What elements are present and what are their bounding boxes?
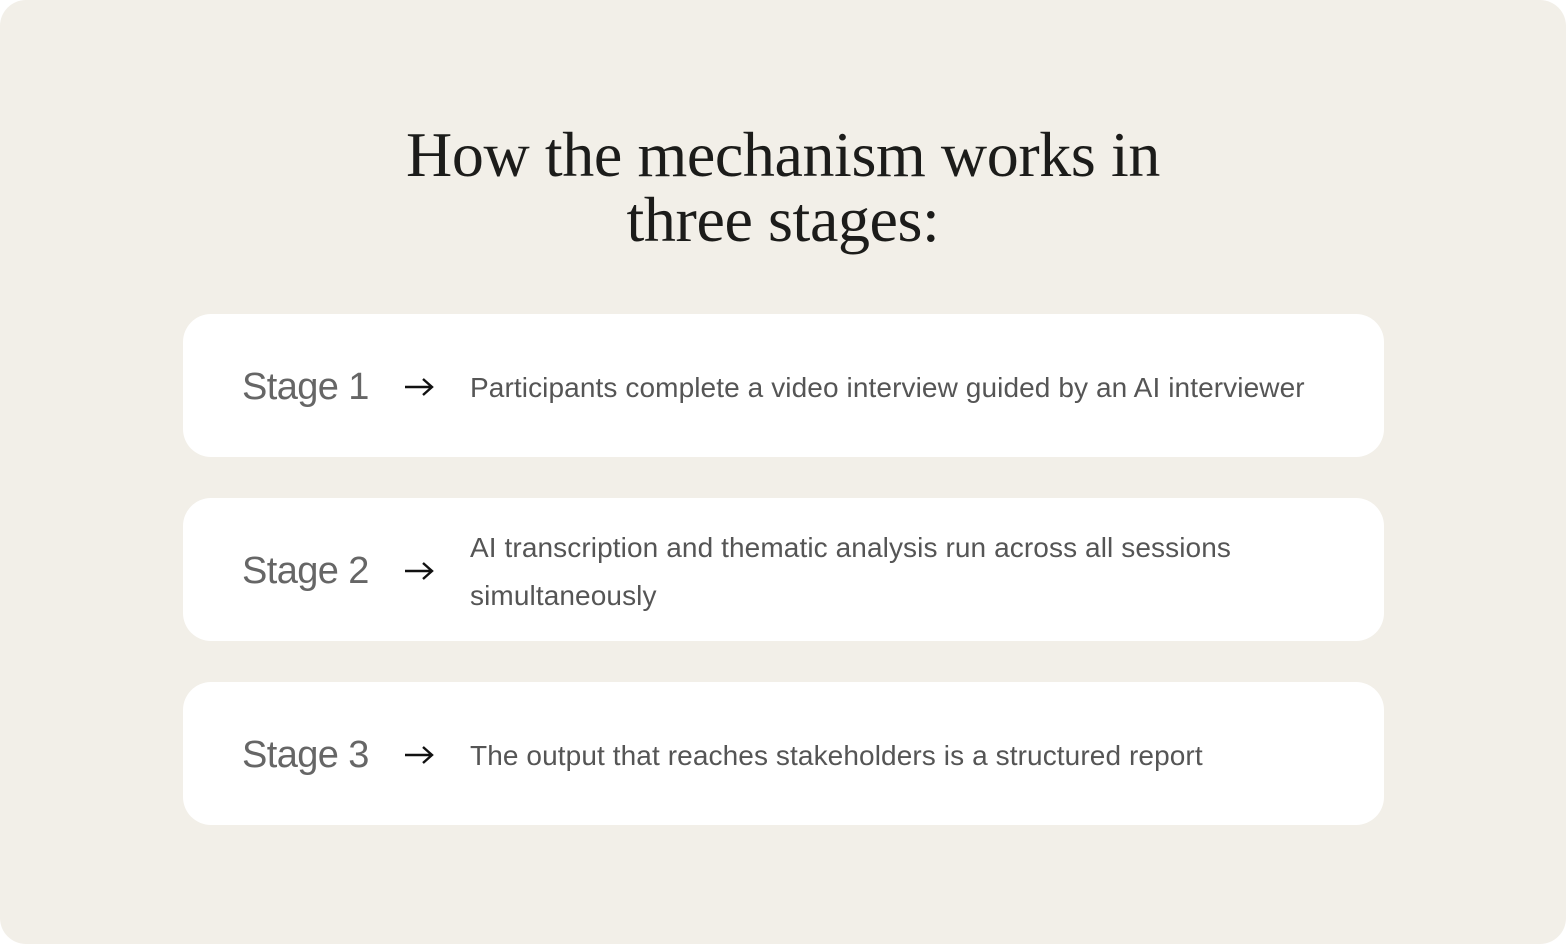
stage 1 label: Stage 1 bbox=[242, 366, 369, 408]
panel: stage 2 bbox=[183, 498, 1384, 641]
panel: stage 1 bbox=[183, 314, 1384, 457]
arrow 3 bbox=[405, 746, 434, 764]
title bbox=[406, 119, 1160, 255]
title: three stages: bbox=[627, 184, 939, 255]
stage 2 description: AI transcription and thematic analysis run across all sessions bbox=[470, 532, 1231, 563]
stage 2 description: simultaneously bbox=[470, 580, 657, 611]
stage 1 description: Participants complete a video interview guided by an AI interviewer bbox=[470, 372, 1305, 403]
arrow 1 bbox=[405, 378, 434, 396]
stage 3 description: The output that reaches stakeholders is a structured report bbox=[470, 740, 1203, 771]
panel: stage 3 bbox=[183, 682, 1384, 825]
stage 3 label: Stage 3 bbox=[242, 734, 369, 776]
stage 2 description bbox=[470, 532, 1231, 611]
arrow 2 bbox=[405, 562, 434, 580]
stage 2 label: Stage 2 bbox=[242, 550, 369, 592]
title: How the mechanism works in bbox=[406, 119, 1160, 190]
